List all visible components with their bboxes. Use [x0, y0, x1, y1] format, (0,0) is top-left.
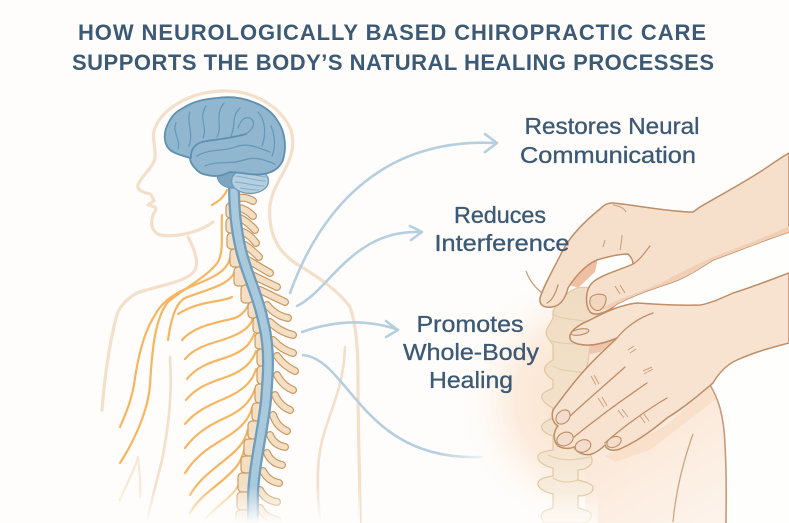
- label: restores neural communication: Restores Neural: [524, 113, 700, 139]
- upper hand and arm: [540, 153, 789, 314]
- label: restores neural communication: Communication: [520, 142, 696, 168]
- arrows: [290, 134, 497, 457]
- brainstem: [217, 168, 240, 188]
- title: SUPPORTS THE BODY’S NATURAL HEALING PROCESSES: [72, 50, 714, 75]
- label: reduces interference: Interference: [434, 230, 570, 256]
- arrow: restores neural communication: [290, 134, 497, 293]
- lower hand and arm: [552, 273, 789, 455]
- adjusted spine segment: [526, 258, 617, 523]
- label: promotes whole-body healing: [403, 311, 540, 393]
- knuckle creases: [591, 346, 653, 423]
- cerebellum: [232, 168, 268, 194]
- label: promotes whole-body healing: Promotes: [416, 311, 524, 337]
- finger separators: [568, 313, 667, 443]
- arrow: to spine: [303, 355, 482, 457]
- shadow between hand and spine: [570, 258, 598, 288]
- shadow under hand: [605, 387, 716, 462]
- label: promotes whole-body healing: Whole-Body: [403, 339, 540, 365]
- upper hand shading: [600, 226, 789, 310]
- fade at bottom of spine: [120, 486, 360, 523]
- label: reduces interference: Reduces: [454, 202, 546, 228]
- white area right of torso and between hands: [590, 232, 789, 523]
- spine: spinous processes: [240, 198, 295, 520]
- label: restores neural communication: [520, 113, 700, 168]
- body outline silhouette: [102, 91, 360, 522]
- label: promotes whole-body healing: Healing: [429, 367, 513, 393]
- title: [72, 20, 714, 75]
- label: reduces interference: [434, 202, 570, 256]
- peach glow: [440, 250, 789, 523]
- brain: [165, 97, 285, 194]
- arrow: promotes whole-body healing: [302, 321, 398, 337]
- spine: vertebral bodies: [226, 203, 271, 523]
- upper thumb nail: [590, 294, 606, 310]
- fade at bottom of adjusted spine: [530, 490, 598, 523]
- back of torso: [585, 385, 726, 523]
- brain folds: [175, 103, 275, 166]
- title: HOW NEUROLOGICALLY BASED CHIROPRACTIC CARE: [78, 20, 706, 45]
- temporal lobe fold: [191, 134, 246, 158]
- cerebrum: [165, 97, 285, 176]
- arrow: reduces interference: [297, 226, 422, 306]
- spinal cord: [234, 187, 268, 523]
- fingernails: [553, 327, 623, 454]
- nerves: [120, 190, 256, 522]
